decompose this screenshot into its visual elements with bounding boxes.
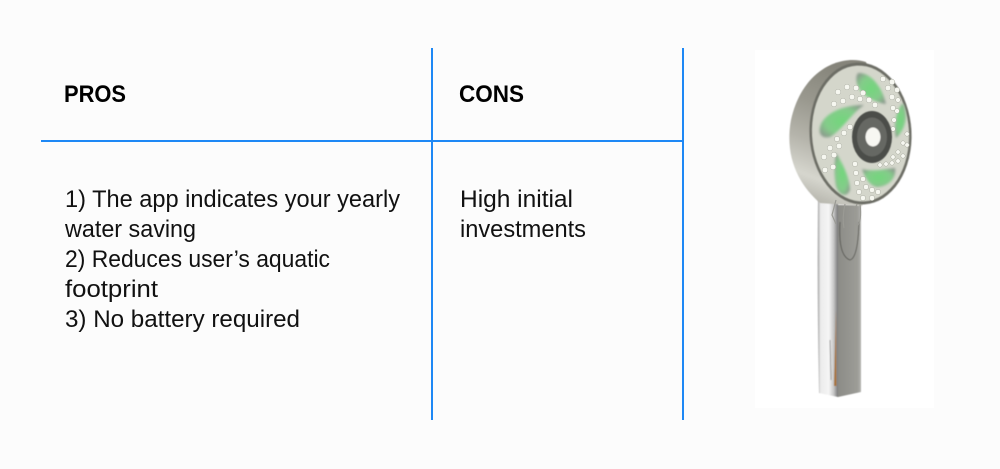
- heading: cons: CONS: [459, 81, 524, 108]
- handle: [818, 196, 861, 397]
- text block: cons: [460, 186, 586, 243]
- head face: [809, 63, 912, 204]
- head body: [789, 60, 885, 206]
- clear clips: [832, 200, 861, 228]
- text block: pros list: footprint: [65, 276, 158, 303]
- table grid lines: [41, 48, 683, 420]
- heading: pros: PROS: [64, 81, 126, 108]
- text block: pros list: 1) The app indicates your yearly: [65, 186, 400, 213]
- text block: pros list: 2) Reduces user’s aquatic: [65, 246, 330, 273]
- spray nozzles: [821, 76, 909, 201]
- text block: pros list: 3) No battery required: [65, 306, 300, 333]
- green petals: [820, 73, 906, 195]
- head rim: [806, 60, 915, 207]
- centre ring: [852, 111, 892, 163]
- text block: pros list: [64, 186, 400, 333]
- text block: cons: High initial: [460, 186, 573, 213]
- text block: pros list: water saving: [64, 216, 196, 243]
- image: shower head: [755, 50, 934, 408]
- text block: cons: investments: [460, 216, 586, 243]
